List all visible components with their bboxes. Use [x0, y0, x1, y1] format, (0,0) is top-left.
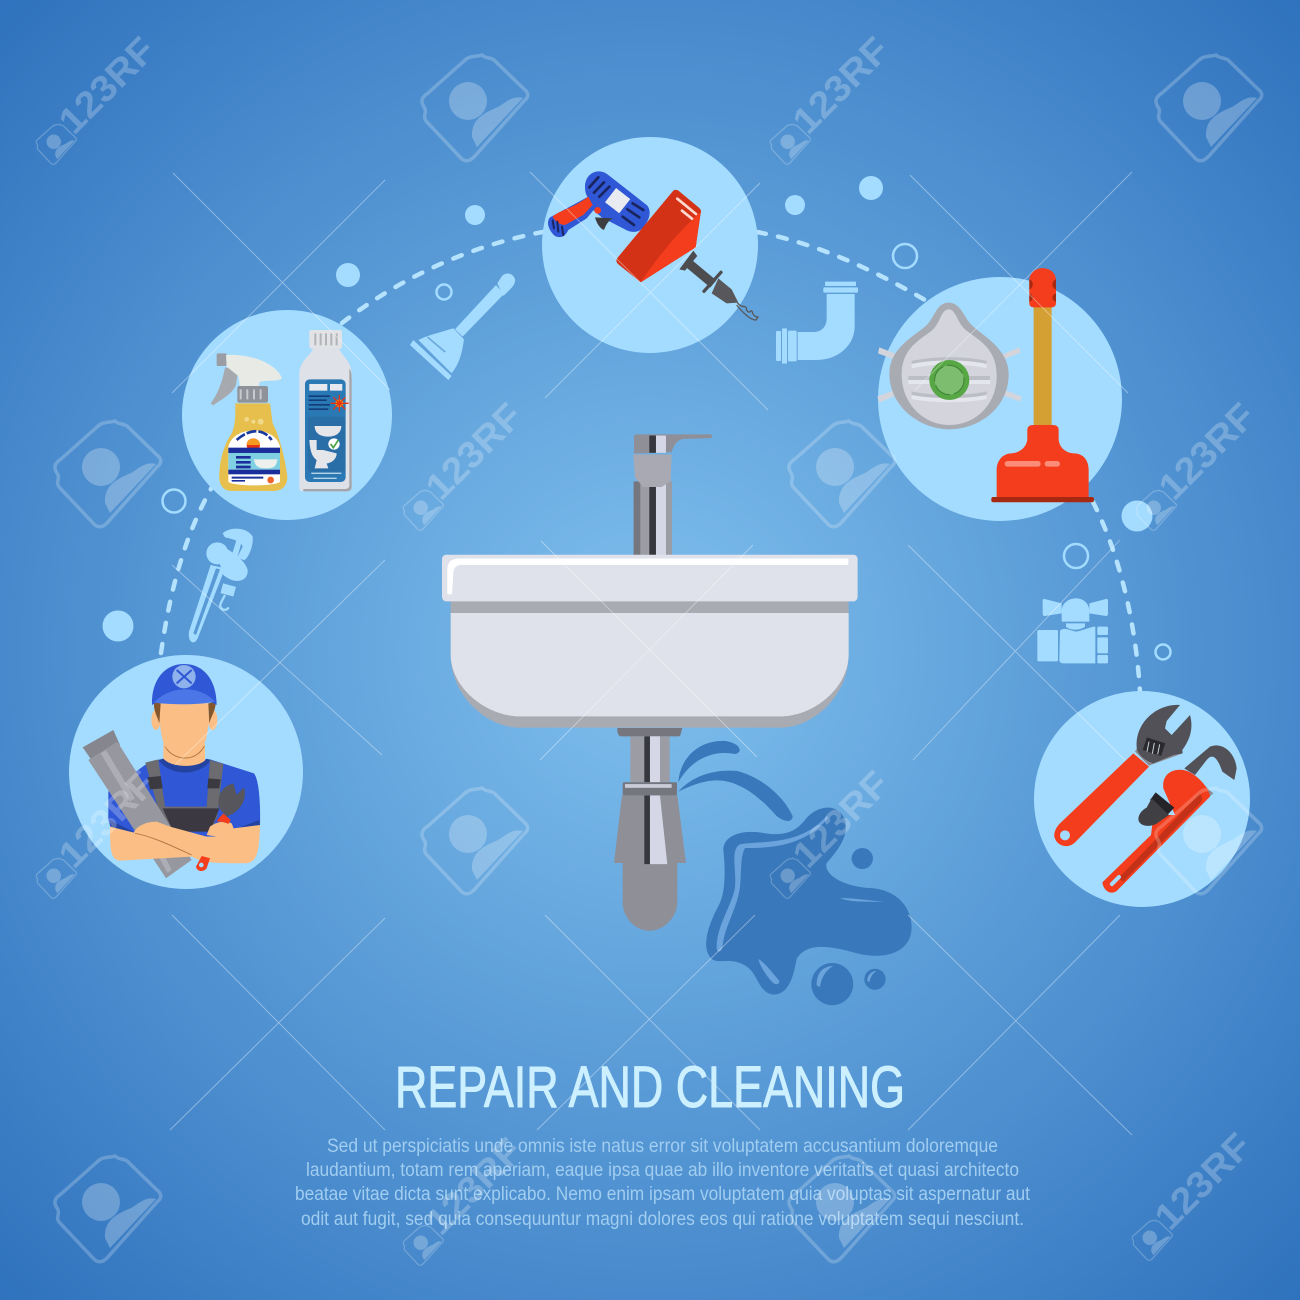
icon: adjustable wrench	[1054, 705, 1191, 846]
icon: red plunger	[991, 268, 1094, 502]
icon: respirator mask	[877, 303, 1022, 429]
panel: plumber circle	[69, 655, 303, 889]
diagonal crossing lines	[170, 172, 1132, 1135]
body text: beatae vitae dicta sunt explicabo. Nemo enim ipsam voluptatem quia voluptas sit aspernatur aut	[295, 1184, 1031, 1205]
icon: electric drain gun	[548, 171, 758, 320]
icon: background valve	[1037, 598, 1108, 663]
icon: background plunger	[410, 273, 515, 380]
body text: odit aut fugit, sed quia consequuntur magni dolores eos qui ratione voluptatem sequi nesciunt.	[301, 1209, 1024, 1230]
faucet	[633, 434, 712, 557]
dashed arc path	[161, 231, 1140, 692]
panel: mask and plunger circle	[877, 268, 1122, 521]
icon: plumber	[83, 664, 260, 878]
panel: cleaning products circle	[182, 310, 392, 520]
panel: wrenches circle	[1034, 691, 1250, 907]
body text	[295, 1136, 1031, 1230]
icon: pipe wrench	[1102, 745, 1237, 893]
icon: background pipe wrench	[189, 529, 253, 642]
sink illustration	[442, 434, 912, 1005]
icon: spray bottle	[211, 353, 287, 491]
floating bubbles	[102, 176, 1170, 660]
title: REPAIR AND CLEANING	[395, 1055, 905, 1120]
panel: drain cleaner tools circle	[542, 137, 758, 353]
icon: cleaner bottle	[299, 330, 352, 491]
body text: laudantium, totam rem aperiam, eaque ipsa quae ab illo inventore veritatis et quasi architecto	[306, 1160, 1019, 1181]
body text: Sed ut perspiciatis unde omnis iste natus error sit voluptatem accusantium doloremque	[327, 1136, 998, 1157]
basin	[442, 555, 858, 728]
icon: background pipe elbow	[776, 282, 858, 364]
drain pipe and trap	[614, 728, 686, 931]
water leak and puddle	[678, 741, 912, 1005]
